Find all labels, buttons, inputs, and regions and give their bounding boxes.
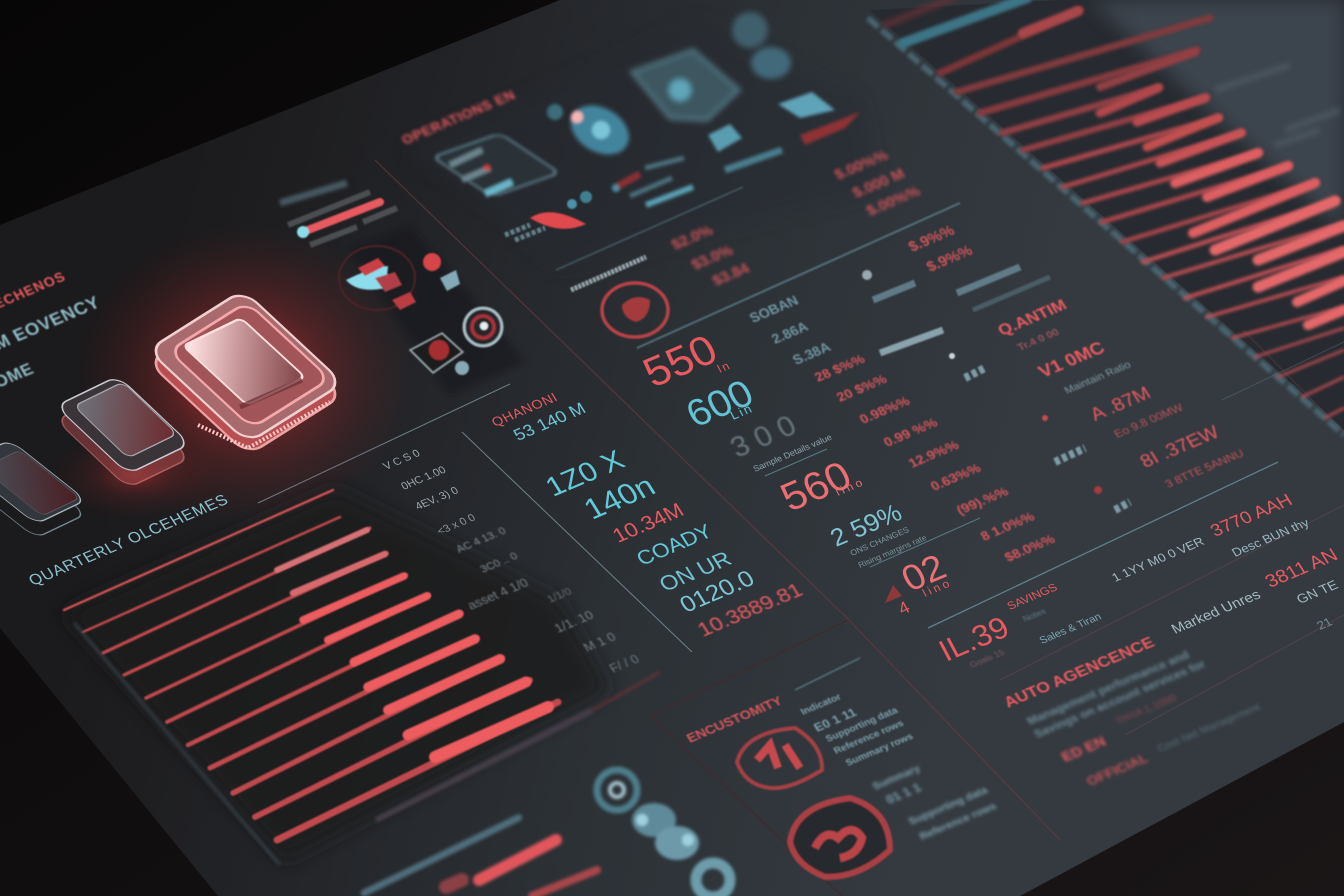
column: red small values: 0.98%%	[857, 394, 912, 426]
bar rows: tracks	[64, 490, 558, 840]
right row labels: 1 1YY M0 0 VER	[1109, 535, 1207, 584]
slider widget	[280, 183, 397, 245]
panel divider: top right	[1243, 330, 1344, 432]
right stats: Q.ANTIM	[995, 297, 1070, 339]
column: red small values	[812, 352, 1057, 564]
metric: 02: 4	[895, 597, 913, 618]
text block: lower badge: Supporting data	[906, 785, 990, 827]
footer rows: ED EN	[1059, 734, 1109, 765]
text block: upper badge	[799, 692, 915, 768]
center column: quarter values: 53 140 M	[510, 399, 589, 444]
red data rows: top	[668, 147, 923, 289]
metric: 550: 550	[636, 326, 725, 397]
red data rows: top: $2.0%	[668, 222, 716, 253]
right stats: A .87M	[1086, 383, 1155, 425]
row labels: left chart: 0HC 1.00	[399, 464, 448, 492]
teal bar	[903, 0, 1027, 43]
icon: target ring	[597, 770, 637, 810]
glass tile: small	[0, 440, 86, 538]
panel: dark chart zone	[62, 488, 610, 862]
teal stat labels	[746, 292, 833, 368]
row labels: left chart: 1/1. 10	[551, 608, 596, 635]
footer rows: OFFICIAL	[1084, 751, 1151, 788]
center column: quarter values: COADY	[632, 520, 716, 570]
column: red small values: 12.9%%	[906, 438, 961, 470]
icon: ring	[464, 308, 502, 346]
bright ends	[1023, 11, 1344, 325]
metric: 2 59%: ONS CHANGES	[848, 524, 911, 558]
metric: 2 59%: Rising margins rate	[856, 532, 929, 570]
metric: 11.39: Notes	[1021, 606, 1048, 624]
icon: red badge	[602, 283, 668, 337]
icon: up triangle	[885, 585, 902, 603]
red data rows: top: $3.84	[709, 260, 753, 289]
right stats: V1 0MC	[1034, 337, 1108, 381]
column: red small values: (99).%%	[954, 484, 1011, 517]
teal stat labels: S.38A	[789, 339, 833, 368]
column: red small values: $8.0%%	[1002, 532, 1057, 564]
icon: red badge lower	[790, 798, 890, 877]
teal stat labels: 2.86A	[768, 318, 811, 347]
icon: red badge upper	[737, 728, 822, 788]
column: red small values: 20 $%%	[834, 372, 889, 404]
right column: icons and labels	[862, 267, 1130, 510]
row labels: left chart: 1/1/0	[545, 586, 574, 605]
row labels: left chart	[381, 448, 642, 675]
heading: encustomity: ENCUSTOMITY	[684, 694, 785, 745]
red data rows: right: $.9%%	[923, 242, 976, 275]
center column: quarter values: 1Z0 X	[540, 445, 630, 503]
ghost labels: top right	[1215, 65, 1340, 145]
metric: 550: ln	[715, 359, 734, 376]
right stats	[995, 297, 1246, 490]
red data rows: top: $.00%%	[863, 183, 923, 219]
description block: Management performance and	[1025, 649, 1192, 727]
text block: upper badge: E0 1 11	[811, 706, 859, 734]
title block	[0, 268, 103, 391]
center column: quarter values: 10.34M	[608, 499, 688, 547]
red data rows: right	[905, 222, 976, 275]
chart baseline	[376, 710, 593, 820]
text block: upper badge: Summary rows	[844, 731, 915, 768]
glass tile: medium	[56, 376, 190, 488]
right row labels: 21	[1314, 615, 1335, 632]
icon: dashboard window	[432, 133, 560, 197]
row labels: left chart: V C S 0	[381, 448, 423, 472]
metric: 560: 560	[773, 453, 859, 520]
text block: upper badge: Reference rows	[832, 718, 906, 756]
metric: 11.39: IL.39	[933, 610, 1015, 668]
right stats: 3 8TTE 5ANNU	[1163, 447, 1246, 490]
icon: cloud blob	[732, 12, 791, 79]
bar chart: left	[64, 490, 558, 840]
text block: lower badge	[870, 763, 999, 842]
teal stat labels: SOBAN	[746, 292, 801, 326]
right row labels: Marked Unres	[1169, 587, 1264, 637]
teal separators	[556, 187, 1344, 690]
description block: Savings on account services for	[1032, 658, 1208, 740]
metric: 11.39: SAVINGS	[1005, 581, 1060, 612]
row labels: left chart: AC 4 13. 0	[454, 525, 508, 555]
dark card of icons	[350, 225, 525, 395]
metric: 11.39: Goals 15	[968, 647, 1006, 670]
metric: 11.39: Sales & Tiran	[1037, 611, 1104, 646]
bar rows: bright ends	[277, 530, 548, 757]
center column: quarter values: 0120.0	[675, 566, 759, 618]
chart left edge	[74, 623, 280, 865]
row labels: left chart: M 1 0	[580, 629, 619, 654]
metric: 02: lino	[920, 576, 955, 600]
panel divider: red	[375, 160, 1060, 840]
icon: person badge	[339, 246, 416, 310]
heading: small label	[571, 257, 646, 290]
right stats: Maintain Ratio	[1062, 359, 1133, 396]
center column: quarter values: QHANONI	[489, 390, 560, 429]
right row labels: GN TE	[1294, 578, 1341, 606]
row labels: left chart: F/ / 0	[606, 651, 642, 675]
row labels: left chart: 3C0 .. 0	[478, 550, 520, 575]
red data rows: top: $.00%%	[831, 147, 891, 183]
center column: quarter values: 10.3889.81	[693, 578, 807, 641]
icon: chip	[410, 333, 469, 375]
row labels: left chart: asset 4 1/0	[464, 575, 531, 612]
metric: grey value: Sample Details value	[751, 432, 834, 474]
text block: lower badge: Reference rows	[917, 801, 999, 842]
metric: 2 59%: 2 59%	[826, 499, 907, 552]
chart baseline: faint red	[593, 672, 660, 710]
footer rows: THYA 1,1000	[1113, 692, 1179, 727]
metric: 600: 600	[679, 372, 761, 436]
column: red small values: 0.99 %%	[881, 415, 940, 449]
footer rows: Cost Net Management	[1155, 702, 1263, 754]
separators: bottom right	[1000, 505, 1344, 735]
metric: 02: 02	[894, 546, 953, 599]
glass tile: large glowing	[148, 290, 343, 455]
row labels: left chart: <3 x 0 0	[435, 512, 478, 537]
panel: dark icon zone	[405, 20, 880, 270]
right stats: Tr.4 0 00	[1015, 327, 1061, 353]
red data rows: right: $.9%%	[905, 222, 958, 255]
panel: top right light corner	[1090, 0, 1344, 230]
metric: 2 59%	[826, 499, 929, 570]
chart heading: QUARTERLY OLCEHEMES	[26, 492, 232, 589]
bottom bars	[364, 817, 597, 896]
row labels: left chart: 4EV, 3) 0	[413, 485, 461, 512]
panel: top right chart zone	[870, 0, 1344, 430]
right stats: Eo 9.8 00MW	[1112, 401, 1185, 440]
panel divider: bottom	[650, 620, 848, 896]
panel divider: chart	[258, 384, 692, 652]
text block: lower badge: Summary	[870, 763, 923, 792]
red data rows: top: $3.0%	[688, 242, 736, 273]
column: red small values: 28 $%%	[812, 352, 867, 384]
icon: twin discs	[632, 803, 699, 860]
icon: round sensor	[547, 95, 638, 165]
right row labels: Desc BUN thy	[1229, 516, 1312, 559]
text block: upper badge: Indicator	[799, 692, 844, 717]
metric: 02	[885, 546, 955, 618]
heading: auto agence: AUTO AGENCENCE	[1001, 634, 1158, 711]
metric: 560: lino	[833, 475, 868, 499]
column: red small values: 8 1.0%%	[978, 509, 1037, 543]
right row labels	[1109, 490, 1342, 637]
icon: red and teal cluster	[778, 92, 860, 145]
bar chart: top right	[885, 0, 1344, 418]
icon: drop tag	[423, 253, 460, 291]
dotted edge of top-right chart	[868, 18, 1344, 435]
center column: quarter values: 140n	[578, 469, 661, 526]
icon: device	[632, 50, 739, 120]
icon: donut	[696, 863, 730, 896]
blurred top bars	[885, 0, 960, 25]
text block: lower badge: 01 1 1	[883, 781, 924, 806]
metric: 11.39	[933, 581, 1104, 670]
heading: top section: OPERATIONS EN	[398, 87, 518, 148]
icon: status cluster	[612, 158, 693, 205]
icon: red fan	[505, 191, 592, 240]
right row labels: 3811 AN	[1261, 545, 1342, 592]
metric: 600: Lin	[727, 400, 756, 423]
column: red small values: 0.63%%	[928, 461, 983, 493]
footer rows	[1059, 692, 1263, 788]
metric: grey value	[725, 409, 834, 474]
chart tracks	[940, 10, 1344, 418]
metric: grey value: 3 0 0	[725, 409, 802, 464]
right stats: 8I .37EW	[1136, 422, 1224, 472]
red glow behind main tile	[75, 225, 415, 525]
red data rows: top: $.000 M	[849, 166, 908, 201]
glow behind middle tile	[50, 430, 220, 520]
text block: upper badge: Supporting data	[824, 705, 901, 744]
right row labels: 3770 AAH	[1206, 490, 1296, 540]
center column: quarter values	[489, 390, 807, 641]
icon: status block	[708, 124, 782, 170]
center column: quarter values: ON UR	[655, 547, 736, 596]
